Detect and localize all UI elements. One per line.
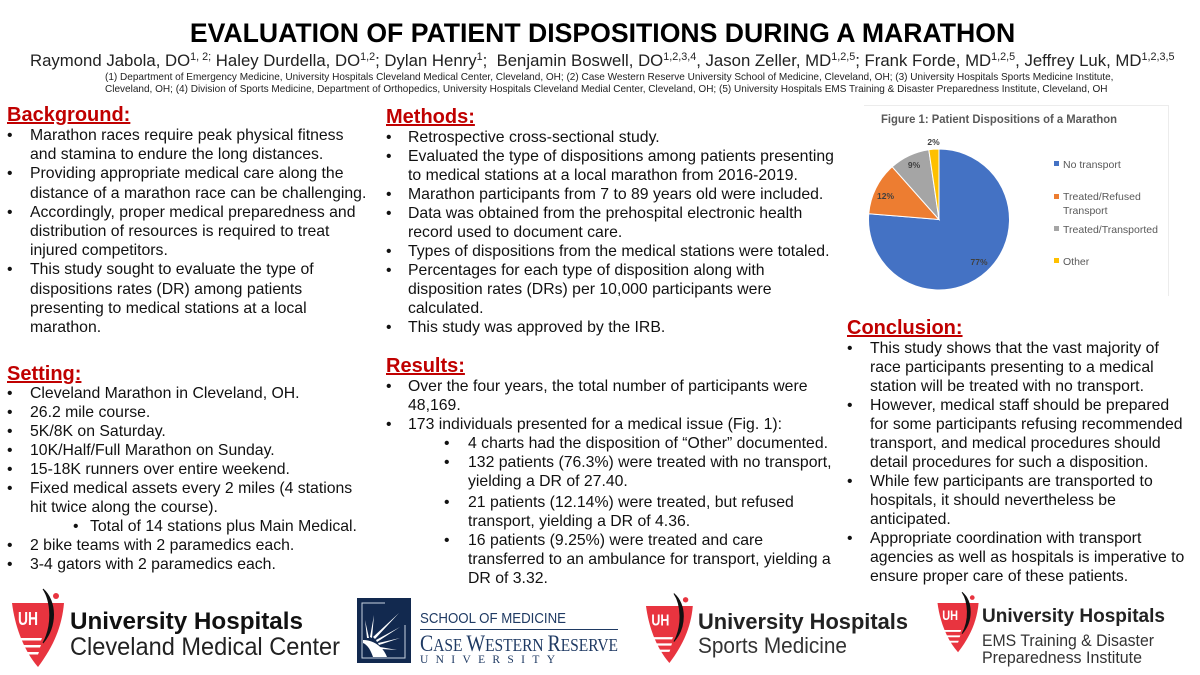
setting bullet list: 5K/8K on Saturday. bbox=[30, 423, 166, 440]
setting bullet list: 2 bike teams with 2 paramedics each. bbox=[30, 537, 294, 554]
results bullet list: • bbox=[386, 416, 392, 433]
results bullet list: transferred to an ambulance for transport, yielding a bbox=[468, 551, 831, 568]
methods bullet list: • bbox=[386, 262, 392, 279]
setting bullet list: 3-4 gators with 2 paramedics each. bbox=[30, 556, 276, 573]
legend: Treated/Transported bbox=[1063, 224, 1158, 236]
results bullet list: 4 charts had the disposition of “Other” documented. bbox=[468, 435, 828, 452]
methods bullet list: Marathon participants from 7 to 89 years old were included. bbox=[408, 186, 823, 203]
logo: University Hospitals Sports Medicine: Sports Medicine bbox=[698, 633, 847, 658]
icon: UH shield bbox=[646, 594, 693, 663]
chart title: Figure 1: Patient Dispositions of a Marathon bbox=[881, 112, 1117, 126]
conclusion bullet list: race participants presenting to a medical bbox=[870, 359, 1154, 376]
background bullet list: This study sought to evaluate the type of bbox=[30, 261, 314, 278]
pie percentage labels: 9% bbox=[908, 160, 921, 170]
background bullet list: Marathon races require peak physical fitness bbox=[30, 127, 343, 144]
heading: background: Background: bbox=[7, 104, 130, 126]
title: EVALUATION OF PATIENT DISPOSITIONS DURING A MARATHON bbox=[190, 18, 1015, 48]
legend: No transport bbox=[1063, 159, 1121, 171]
conclusion bullet list bbox=[847, 340, 1184, 585]
setting bullet list bbox=[7, 385, 357, 573]
icon: UH shield: UH bbox=[18, 609, 38, 629]
methods bullet list: • bbox=[386, 205, 392, 222]
conclusion bullet list: • bbox=[847, 473, 853, 490]
logo text: University Hospitals bbox=[982, 606, 1165, 627]
results bullet list: 132 patients (76.3%) were treated with no transport, bbox=[468, 454, 832, 471]
results bullet list: 21 patients (12.14%) were treated, but refused bbox=[468, 494, 794, 511]
background bullet list: presenting to medical stations at a local bbox=[30, 300, 307, 317]
affiliations: Cleveland, OH; (4) Division of Sports Medicine, Department of Orthopedics, University Hospitals Cleveland Medial Center, Cleveland, OH; (5) University Hospitals EMS Training & Disaster Preparedness Institute, Cleveland, OH bbox=[105, 84, 1108, 95]
pie percentage labels: 77% bbox=[970, 257, 988, 267]
background bullet list: distance of a marathon race can be challenging. bbox=[30, 185, 366, 202]
legend bbox=[1054, 159, 1158, 268]
panel: conclusion bbox=[847, 317, 1184, 585]
legend: Transport bbox=[1063, 205, 1108, 217]
logo: Case Western Reserve University School of Medicine bbox=[357, 598, 618, 666]
setting bullet list: • bbox=[7, 404, 13, 421]
conclusion bullet list: • bbox=[847, 397, 853, 414]
results bullet list: • bbox=[444, 494, 450, 511]
results bullet list: 16 patients (9.25%) were treated and care bbox=[468, 532, 763, 549]
authors: Raymond Jabola, DO1, 2; Haley Durdella, DO1,2; Dylan Henry1; Benjamin Boswell, DO1,2,3,4, Jason Zeller, MD1,2,5; Frank Forde, MD1,2,5, Jeffrey Luk, MD1,2,3,5 bbox=[30, 51, 1174, 70]
conclusion bullet list: • bbox=[847, 340, 853, 357]
background bullet list: and stamina to endure the long distances. bbox=[30, 146, 323, 163]
setting bullet list: • bbox=[7, 423, 13, 440]
results bullet list bbox=[386, 378, 832, 587]
results bullet list: 48,169. bbox=[408, 397, 461, 414]
logo text: University Hospitals bbox=[70, 608, 303, 635]
panel: setting bbox=[7, 363, 357, 573]
setting bullet list: Fixed medical assets every 2 miles (4 stations bbox=[30, 480, 352, 497]
setting bullet list: • bbox=[7, 461, 13, 478]
conclusion bullet list: While few participants are transported to bbox=[870, 473, 1153, 490]
icon: UH shield bbox=[938, 592, 979, 652]
background bullet list: Providing appropriate medical care along the bbox=[30, 165, 344, 182]
background bullet list: Accordingly, proper medical preparedness and bbox=[30, 204, 355, 221]
conclusion bullet list: station will be treated with no transport. bbox=[870, 378, 1144, 395]
methods bullet list: • bbox=[386, 148, 392, 165]
setting bullet list: hit twice along the course). bbox=[30, 499, 218, 516]
pie percentage labels bbox=[877, 137, 988, 267]
panel: results bbox=[386, 355, 832, 587]
methods bullet list: • bbox=[386, 129, 392, 146]
results bullet list: 173 individuals presented for a medical issue (Fig. 1): bbox=[408, 416, 782, 433]
setting bullet list: • bbox=[7, 556, 13, 573]
setting bullet list: 15-18K runners over entire weekend. bbox=[30, 461, 290, 478]
setting bullet list: Cleveland Marathon in Cleveland, OH. bbox=[30, 385, 300, 402]
icon: UH shield: UH bbox=[942, 607, 958, 623]
methods bullet list: Data was obtained from the prehospital electronic health bbox=[408, 205, 802, 222]
results bullet list: • bbox=[444, 435, 450, 452]
heading: methods: Methods: bbox=[386, 106, 475, 128]
methods bullet list: • bbox=[386, 319, 392, 336]
panel: background bbox=[7, 104, 366, 336]
panel: methods bbox=[386, 106, 834, 336]
setting bullet list: • bbox=[7, 537, 13, 554]
logo: Case Western Reserve University School of Medicine: CASE WESTERN RESERVE bbox=[420, 631, 618, 656]
background bullet list bbox=[7, 127, 366, 336]
logo: University Hospitals EMS Training and Disaster Preparedness Institute: EMS Training & Disaster bbox=[982, 631, 1154, 650]
conclusion bullet list: for some participants refusing recommended bbox=[870, 416, 1183, 433]
background bullet list: dispositions rates (DR) among patients bbox=[30, 281, 302, 298]
results bullet list: • bbox=[386, 378, 392, 395]
legend: Treated/Refused bbox=[1063, 191, 1141, 203]
affiliations bbox=[105, 72, 1113, 95]
background bullet list: • bbox=[7, 261, 13, 278]
background bullet list: injured competitors. bbox=[30, 242, 168, 259]
conclusion bullet list: detail procedures for such a disposition. bbox=[870, 454, 1148, 471]
background bullet list: distribution of resources is required to treat bbox=[30, 223, 329, 240]
icon: UH shield bbox=[12, 589, 64, 667]
heading: results: Results: bbox=[386, 355, 465, 377]
pie slices bbox=[869, 149, 1010, 290]
methods bullet list bbox=[386, 129, 834, 336]
icon: starburst square bbox=[357, 598, 411, 663]
logo: University Hospitals EMS Training and Disaster Preparedness Institute: Preparedness Institute bbox=[982, 648, 1142, 667]
logo: University Hospitals EMS Training and Disaster Preparedness Institute bbox=[938, 592, 1165, 667]
logo text: University Hospitals bbox=[698, 609, 908, 634]
logo: University Hospitals Cleveland Medical Center bbox=[12, 588, 340, 667]
heading: setting: Setting: bbox=[7, 363, 81, 385]
heading: conclusion: Conclusion: bbox=[847, 317, 963, 339]
results bullet list: yielding a DR of 27.40. bbox=[468, 473, 628, 490]
results bullet list: Over the four years, the total number of participants were bbox=[408, 378, 808, 395]
pie chart: patient dispositions bbox=[864, 105, 1169, 296]
methods bullet list: Retrospective cross-sectional study. bbox=[408, 129, 660, 146]
setting bullet list: • bbox=[7, 480, 13, 497]
setting bullet list: • bbox=[73, 518, 79, 535]
background bullet list: • bbox=[7, 165, 13, 182]
logo: University Hospitals Cleveland Medical Center: Cleveland Medical Center bbox=[70, 633, 340, 661]
setting bullet list: • bbox=[7, 385, 13, 402]
conclusion bullet list: This study shows that the vast majority of bbox=[870, 340, 1159, 357]
methods bullet list: to medical stations at a local marathon from 2016-2019. bbox=[408, 167, 798, 184]
methods bullet list: • bbox=[386, 243, 392, 260]
conclusion bullet list: ensure proper care of these patients. bbox=[870, 568, 1128, 585]
setting bullet list: 10K/Half/Full Marathon on Sunday. bbox=[30, 442, 275, 459]
affiliations: (1) Department of Emergency Medicine, University Hospitals Cleveland Medical Center, Cleveland, OH; (2) Case Western Reserve University School of Medicine, Cleveland, OH; (3) University Hospitals Sports Medicine Institute, bbox=[105, 72, 1113, 82]
pie percentage labels: 2% bbox=[927, 137, 940, 147]
setting bullet list: • bbox=[7, 442, 13, 459]
setting bullet list: Total of 14 stations plus Main Medical. bbox=[90, 518, 357, 535]
results bullet list: • bbox=[444, 532, 450, 549]
methods bullet list: calculated. bbox=[408, 300, 484, 317]
results bullet list: transport, yielding a DR of 4.36. bbox=[468, 513, 690, 530]
conclusion bullet list: hospitals, it should nevertheless be bbox=[870, 492, 1116, 509]
icon: UH shield: UH bbox=[651, 612, 669, 630]
background bullet list: • bbox=[7, 204, 13, 221]
conclusion bullet list: However, medical staff should be prepared bbox=[870, 397, 1169, 414]
logo: Case Western Reserve University School of Medicine: UNIVERSITY bbox=[420, 654, 556, 666]
results bullet list: DR of 3.32. bbox=[468, 570, 548, 587]
pie percentage labels: 12% bbox=[877, 191, 894, 201]
setting bullet list: 26.2 mile course. bbox=[30, 404, 150, 421]
logo text: SCHOOL OF MEDICINE bbox=[420, 610, 566, 627]
methods bullet list: • bbox=[386, 186, 392, 203]
methods bullet list: disposition rates (DRs) per 10,000 participants were bbox=[408, 281, 772, 298]
methods bullet list: Evaluated the type of dispositions among patients presenting bbox=[408, 148, 834, 165]
background bullet list: marathon. bbox=[30, 319, 101, 336]
conclusion bullet list: • bbox=[847, 530, 853, 547]
methods bullet list: Types of dispositions from the medical stations were totaled. bbox=[408, 243, 829, 260]
methods bullet list: record used to document care. bbox=[408, 224, 622, 241]
methods bullet list: This study was approved by the IRB. bbox=[408, 319, 665, 336]
conclusion bullet list: transport, and medical procedures should bbox=[870, 435, 1161, 452]
conclusion bullet list: anticipated. bbox=[870, 511, 951, 528]
background bullet list: • bbox=[7, 127, 13, 144]
conclusion bullet list: Appropriate coordination with transport bbox=[870, 530, 1141, 547]
logo: University Hospitals Sports Medicine bbox=[646, 593, 908, 663]
chart frame bbox=[864, 106, 1168, 296]
results bullet list: • bbox=[444, 454, 450, 471]
legend: Other bbox=[1063, 256, 1090, 268]
methods bullet list: Percentages for each type of disposition along with bbox=[408, 262, 765, 279]
conclusion bullet list: agencies as well as hospitals is imperative to bbox=[870, 549, 1184, 566]
